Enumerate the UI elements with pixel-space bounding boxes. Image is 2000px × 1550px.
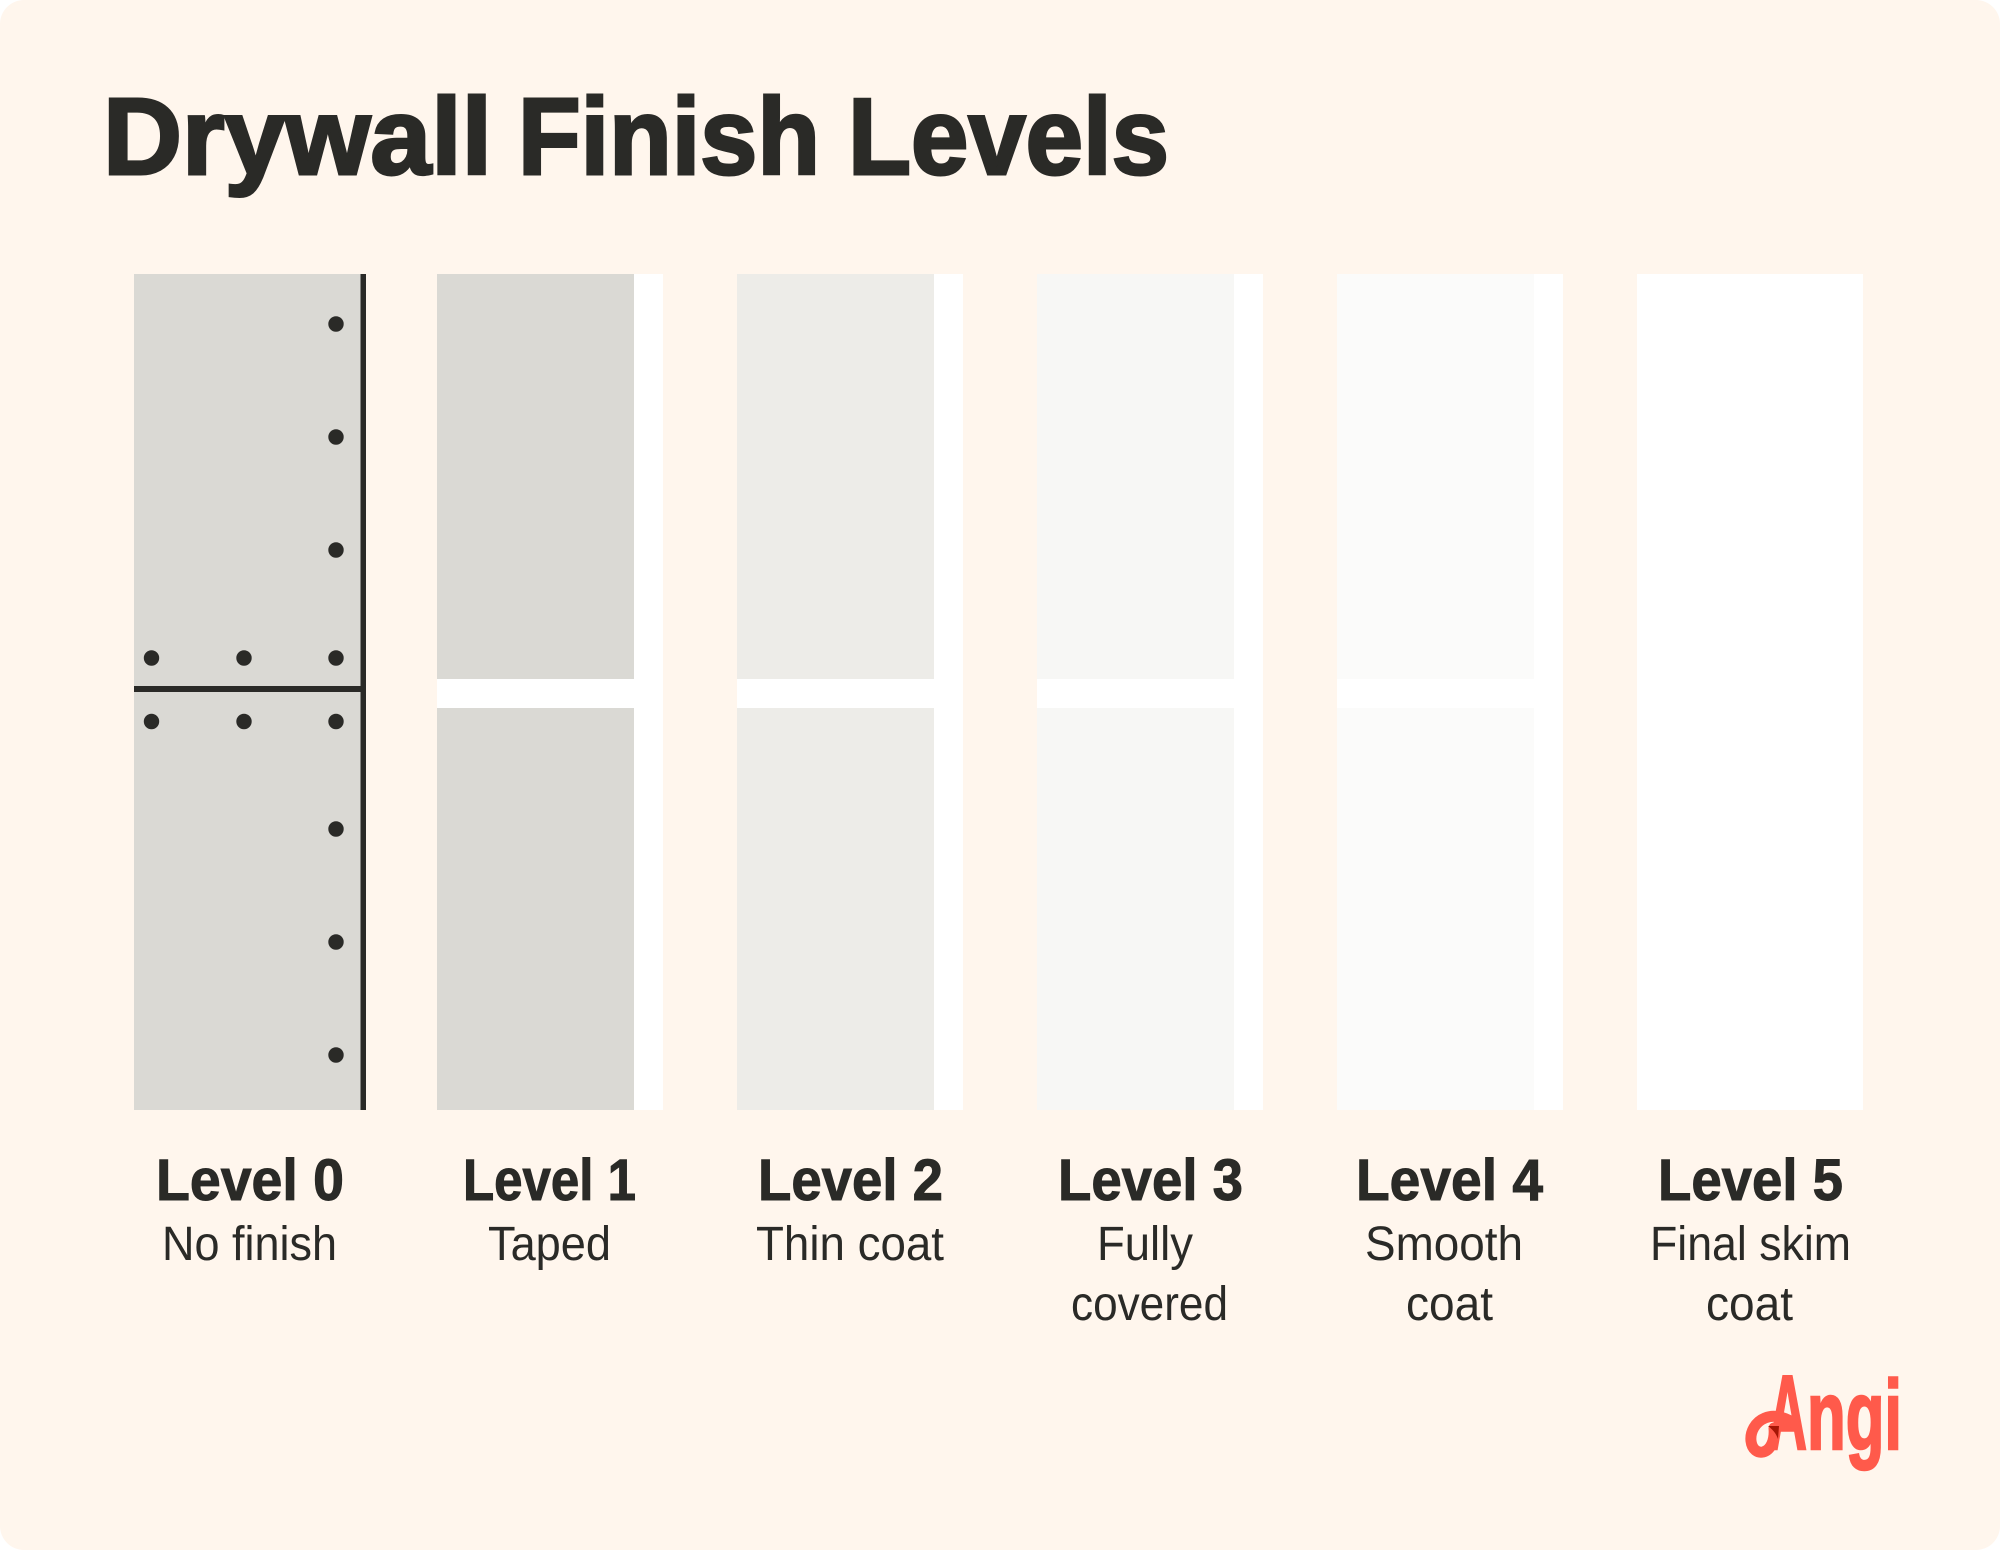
label: level 4 (1356, 1148, 1543, 1331)
label: level 2: Level 2 (758, 1148, 943, 1213)
label: level 3 (1058, 1148, 1243, 1331)
panel: level 0 (134, 274, 366, 1110)
panel: level 2 (737, 274, 963, 1110)
label: level 0 (156, 1148, 344, 1271)
label: level 2 (756, 1148, 944, 1271)
label: level 1: Taped (488, 1218, 611, 1271)
logo loop (1751, 1416, 1794, 1452)
label: level 4: Level 4 (1356, 1148, 1543, 1213)
label: level 1: Level 1 (463, 1148, 636, 1213)
logo: Angi (1751, 1354, 1902, 1472)
panel: level 3 (1037, 274, 1263, 1110)
label: level 3: covered (1071, 1278, 1228, 1331)
vertical seam (360, 274, 366, 1110)
label: level 4: Smooth (1365, 1218, 1523, 1271)
title: Finish (518, 76, 820, 198)
label: level 1 (463, 1148, 636, 1271)
panel: level 1 (437, 274, 663, 1110)
title: Drywall (103, 76, 492, 198)
label: level 5: Level 5 (1658, 1148, 1843, 1213)
label: level 0: No finish (162, 1218, 337, 1271)
title (103, 76, 1169, 198)
screw dots (144, 316, 344, 1063)
horizontal seam (134, 686, 360, 692)
label: level 5 (1650, 1148, 1851, 1331)
logo shadow (1768, 1426, 1779, 1439)
label: level 5: Final skim (1650, 1218, 1851, 1271)
panel: level 4 (1337, 274, 1563, 1110)
label: level 4: coat (1406, 1278, 1493, 1331)
title: Levels (848, 76, 1169, 198)
label: level 5: coat (1706, 1278, 1793, 1331)
panel: level 5 (1637, 274, 1863, 1110)
logo: Angi: ngi (1807, 1360, 1902, 1470)
label: level 2: Thin coat (756, 1218, 944, 1271)
label: level 3: Level 3 (1058, 1148, 1243, 1213)
label: level 0: Level 0 (156, 1148, 344, 1213)
label: level 3: Fully (1097, 1218, 1193, 1271)
logo: Angi: A (1768, 1354, 1807, 1472)
